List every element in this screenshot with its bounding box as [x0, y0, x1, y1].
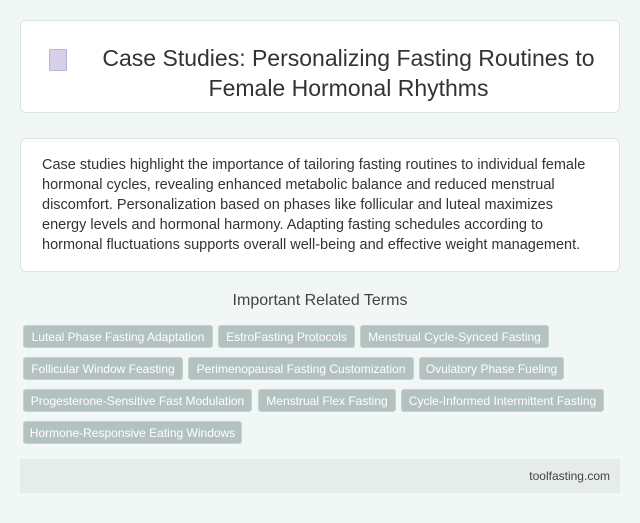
tags: Menstrual Cycle-Synced Fasting: [368, 330, 541, 344]
summary text card: Case studies highlight the importance of tailoring fasting routines to individual female hormonal cycles, revealing enhanced metabolic balance and reduced menstrual discomfort. Personalization based on phases like follicular and luteal maximizes energy levels and hormonal harmony. Adapting fasting schedules according to hormonal fluctuations supports overall well-being and effective weight management.: [42, 157, 585, 253]
icon: document: [49, 49, 67, 71]
tags: EstroFasting Protocols: [226, 330, 347, 344]
tags: Luteal Phase Fasting Adaptation: [32, 330, 204, 344]
title: Case Studies: Personalizing Fasting Routines to Female Hormonal Rhythms: [102, 45, 595, 101]
header card: [20, 20, 620, 113]
tags: Follicular Window Feasting: [31, 362, 175, 376]
tags: Hormone-Responsive Eating Windows: [30, 426, 235, 440]
summary text card: [20, 138, 620, 272]
footer: toolfasting.com: [529, 469, 610, 483]
tags: Cycle-Informed Intermittent Fasting: [409, 394, 596, 408]
tags: Ovulatory Phase Fueling: [426, 362, 557, 376]
tags: Perimenopausal Fasting Customization: [197, 362, 405, 376]
tags: Progesterone-Sensitive Fast Modulation: [31, 394, 244, 408]
tags: Menstrual Flex Fasting: [266, 394, 388, 408]
section heading: Important Related Terms: [233, 292, 407, 309]
footer: [20, 459, 620, 493]
